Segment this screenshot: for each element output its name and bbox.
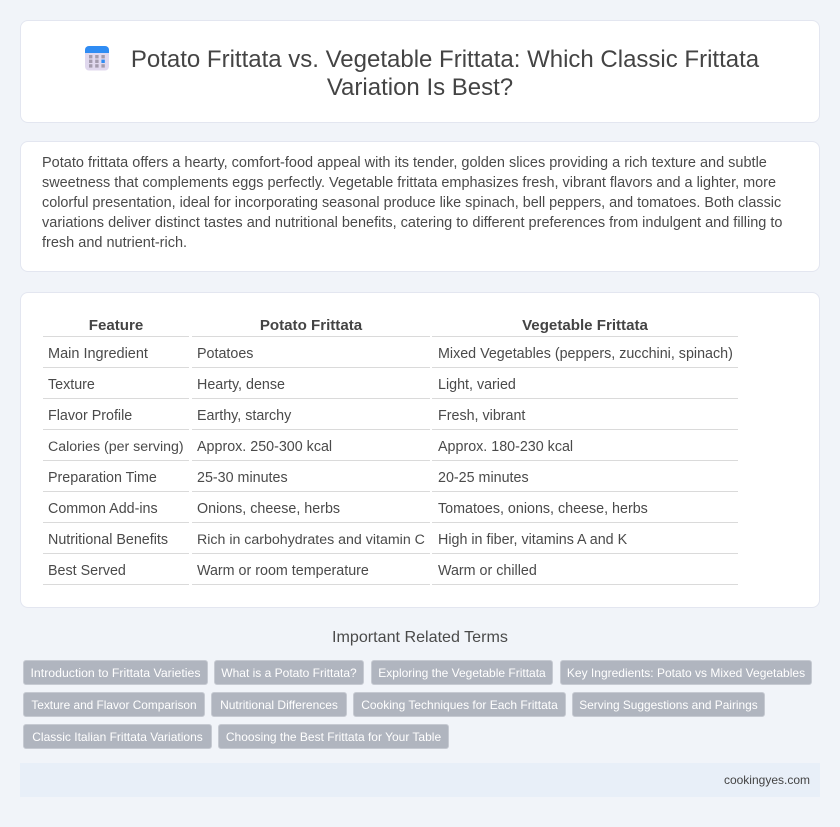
table rows: Warm or room temperature	[197, 563, 369, 579]
table rows: Onions, cheese, herbs	[197, 501, 340, 517]
table rows: 20-25 minutes	[438, 470, 529, 486]
table rows: Potatoes	[197, 346, 253, 362]
related term tags: What is a Potato Frittata?	[221, 666, 357, 680]
table rows: Main Ingredient	[48, 346, 148, 362]
related term tags: Key Ingredients: Potato vs Mixed Vegetables	[567, 666, 805, 680]
table rows: 25-30 minutes	[197, 470, 288, 486]
footer source: cookingyes.com	[724, 773, 810, 787]
intro text: fresh and nutrient-rich.	[42, 235, 187, 251]
comparison table	[43, 317, 738, 585]
related term tags: Texture and Flavor Comparison	[31, 698, 197, 712]
footer bar	[20, 763, 820, 797]
table header: Feature	[89, 317, 143, 334]
table rows: High in fiber, vitamins A and K	[438, 532, 627, 548]
table header	[43, 317, 738, 337]
table rows: Light, varied	[438, 377, 516, 393]
related term tags: Classic Italian Frittata Variations	[32, 730, 203, 744]
panel: comparison table	[20, 292, 820, 608]
table rows: Nutritional Benefits	[48, 532, 168, 548]
table rows: Common Add-ins	[48, 501, 158, 517]
related term tags: Cooking Techniques for Each Frittata	[361, 698, 558, 712]
header card	[20, 20, 820, 123]
table rows: Rich in carbohydrates and vitamin C	[197, 532, 425, 548]
table rows: Hearty, dense	[197, 377, 285, 393]
table rows: Tomatoes, onions, cheese, herbs	[438, 501, 648, 517]
table header: Potato Frittata	[260, 317, 362, 334]
intro text: sweetness that complements eggs perfectly. Vegetable frittata emphasizes fresh, vibrant flavors and a lighter, more	[42, 175, 776, 191]
table rows: Preparation Time	[48, 470, 157, 486]
table rows: Best Served	[48, 563, 126, 579]
related term tags: Choosing the Best Frittata for Your Table	[226, 730, 441, 744]
table rows: Mixed Vegetables (peppers, zucchini, spinach)	[438, 346, 733, 362]
table rows: Calories (per serving)	[48, 439, 184, 455]
table rows: Warm or chilled	[438, 563, 537, 579]
intro text: colorful presentation, ideal for incorporating seasonal produce like spinach, bell peppers, and tomatoes. Both classic	[42, 195, 781, 211]
table rows	[43, 346, 738, 585]
table rows: Approx. 180-230 kcal	[438, 439, 573, 455]
table rows: Flavor Profile	[48, 408, 132, 424]
panel: intro paragraph	[20, 141, 820, 272]
title: Variation Is Best?	[327, 74, 513, 101]
table rows: Fresh, vibrant	[438, 408, 525, 424]
title: Potato Frittata vs. Vegetable Frittata: Which Classic Frittata	[131, 46, 759, 73]
related term tags	[23, 660, 812, 749]
intro text: Potato frittata offers a hearty, comfort-food appeal with its tender, golden slices providing a rich texture and subtle	[42, 155, 767, 171]
intro text: variations deliver distinct tastes and nutritional benefits, catering to different preferences from indulgent and filling to	[42, 215, 782, 231]
title	[131, 46, 760, 101]
table rows: Approx. 250-300 kcal	[197, 439, 332, 455]
related term tags: Serving Suggestions and Pairings	[579, 698, 758, 712]
icon: calendar	[85, 46, 109, 70]
table rows: Texture	[48, 377, 95, 393]
intro text	[42, 155, 782, 251]
related term tags: Nutritional Differences	[220, 698, 338, 712]
related term tags: Introduction to Frittata Varieties	[31, 666, 200, 680]
table rows: Earthy, starchy	[197, 408, 291, 424]
related term tags: Exploring the Vegetable Frittata	[378, 666, 546, 680]
related terms heading: Important Related Terms	[332, 628, 508, 646]
table header: Vegetable Frittata	[522, 317, 648, 334]
